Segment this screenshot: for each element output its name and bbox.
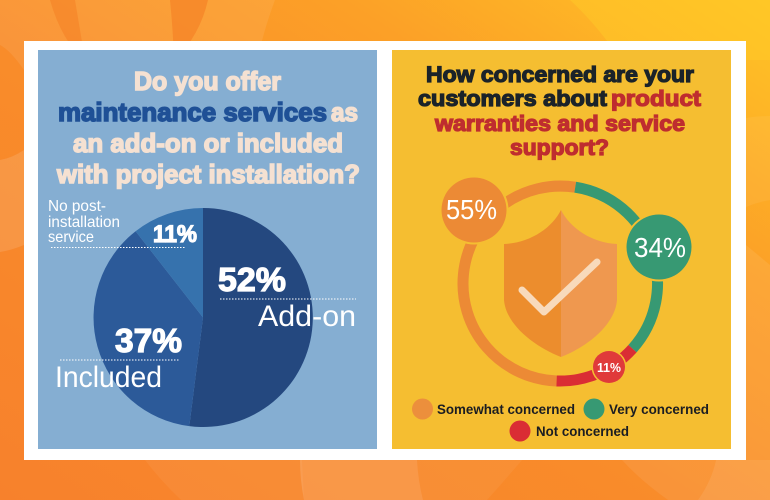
slice: included 37%: [94, 231, 203, 426]
legend: [412, 398, 709, 442]
badge: 34%: 34%: [634, 232, 686, 263]
label: add-on 52%: [218, 261, 356, 333]
heading: customer concern question: [418, 62, 702, 160]
legend item: not concerned: Not concerned: [536, 423, 629, 439]
arc: somewhat concerned: [463, 186, 575, 381]
legend item: not concerned: [510, 420, 629, 442]
badge: 55%: [440, 176, 508, 244]
legend item: somewhat concerned: [412, 398, 575, 420]
label: no post-installation service 11%: [48, 198, 197, 248]
label: included 37%: 37%: [115, 322, 182, 359]
badge: 11%: [592, 350, 626, 384]
label: included 37%: [55, 322, 182, 394]
heading: customer concern question: product: [611, 86, 702, 111]
label: no post-installation service 11%: service: [48, 229, 94, 246]
heading: customer concern question: customers about: [418, 86, 608, 111]
panel background: blue: [38, 50, 377, 449]
legend item: somewhat concerned: Somewhat concerned: [437, 401, 575, 417]
slice: add-on 52%: [189, 208, 313, 427]
panel: maintenance services: [38, 50, 377, 449]
heading: maintenance services question: [56, 66, 360, 189]
icon: shield with check mark: [504, 210, 617, 357]
heading: customer concern question: support?: [510, 135, 609, 160]
pie chart: maintenance offering: [94, 208, 313, 427]
arc: very concerned: [575, 187, 658, 349]
badge: 55%: 55%: [446, 194, 497, 225]
panel background: yellow: [392, 50, 731, 449]
label: included 37%: Included: [55, 361, 162, 394]
label: no post-installation service 11%: installation: [48, 214, 120, 231]
badge: 11%: 11%: [597, 360, 621, 375]
label: no post-installation service 11%: 11%: [153, 221, 197, 248]
label: add-on 52%: 52%: [218, 261, 286, 298]
heading: maintenance services question: with project installation?: [56, 159, 360, 189]
panel: customer concern: [392, 50, 731, 449]
ring chart: concern levels: [463, 186, 658, 381]
heading: customer concern question: How concerned are your: [426, 62, 694, 87]
heading: maintenance services question: an add-on or included: [73, 128, 343, 158]
label: add-on 52%: Add-on: [258, 300, 356, 333]
legend item: very concerned: [584, 398, 709, 420]
label: no post-installation service 11%: No post-: [48, 198, 106, 215]
heading: maintenance services question: Do you offer: [134, 66, 281, 96]
arc: not concerned: [557, 349, 632, 381]
heading: customer concern question: warranties and service: [434, 111, 685, 136]
heading: maintenance services question: as: [331, 97, 358, 127]
slice: no post-installation service 11%: [136, 208, 203, 318]
badge: 34%: [624, 212, 694, 282]
heading: maintenance services question: maintenance services: [58, 97, 327, 127]
white card: [24, 41, 746, 460]
legend item: very concerned: Very concerned: [609, 401, 709, 417]
